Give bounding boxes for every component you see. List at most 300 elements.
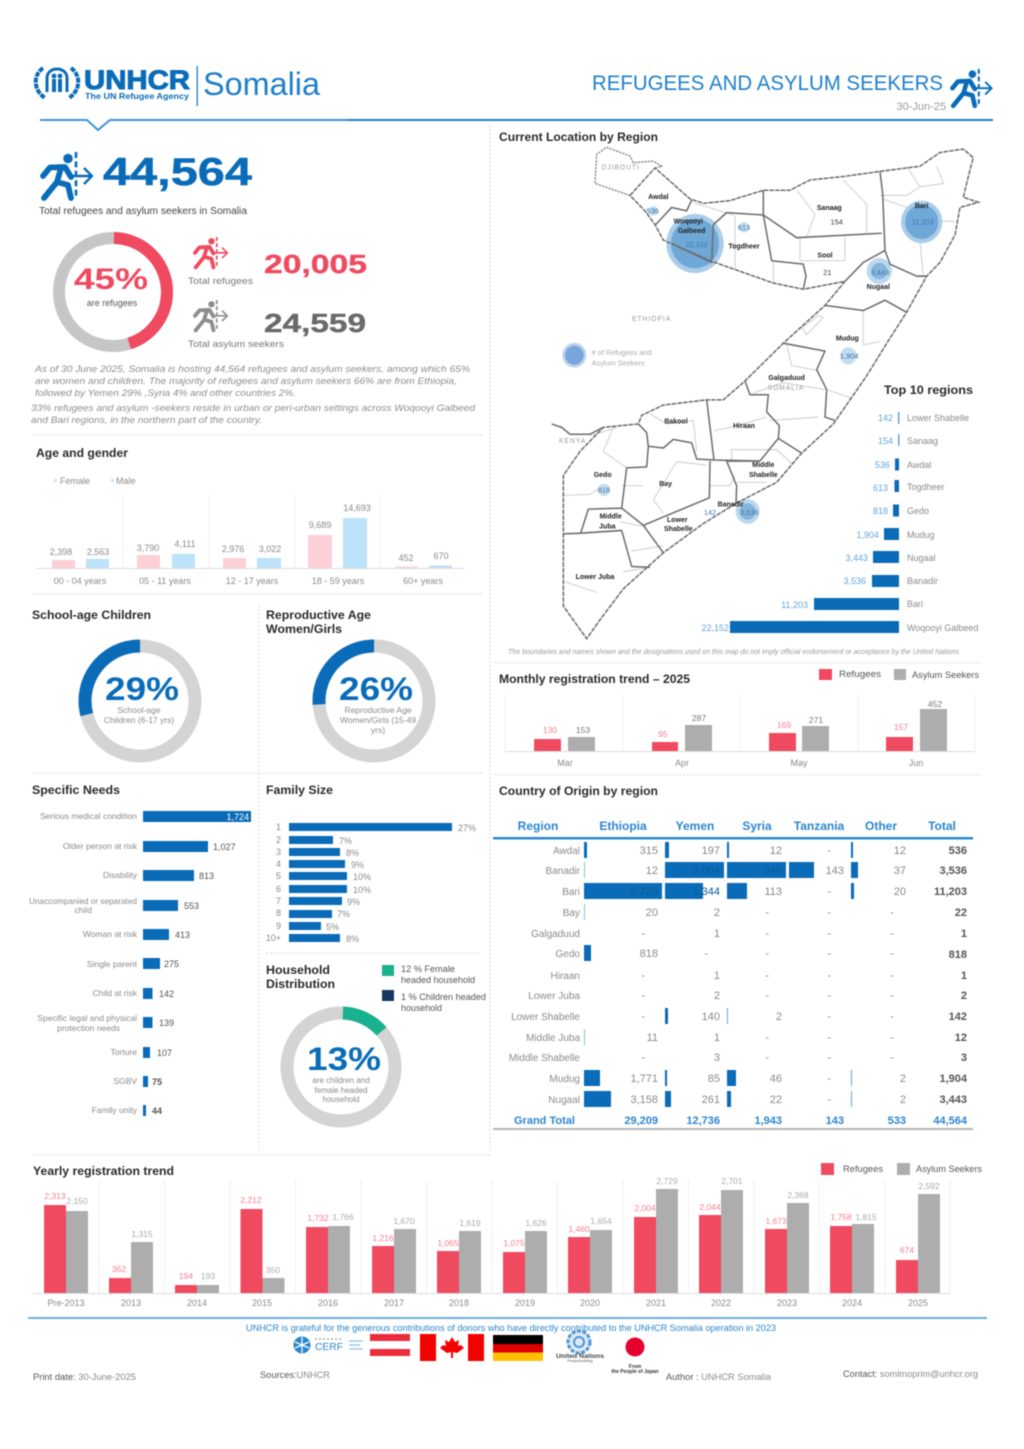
logo: United Nations: Peacebuilding xyxy=(567,1358,593,1363)
logo: from the people of Japan: the People of Japan xyxy=(611,1369,659,1375)
table Other column: - xyxy=(890,928,894,940)
table Other column: - xyxy=(890,970,894,982)
table Total column: 11,203 xyxy=(934,886,967,898)
bar chart: yearly trend: 362 xyxy=(112,1264,126,1274)
donut: share of refugees: are refugees xyxy=(87,298,138,308)
bar chart: age groups: 2,976 xyxy=(222,544,244,554)
table Ethiopia column: 3,158 xyxy=(630,1094,658,1106)
flag: Canada xyxy=(420,1334,484,1361)
bar chart: specific needs: Unaccompanied or separated xyxy=(29,896,137,906)
map: country labels xyxy=(559,165,804,445)
table Tanzania column: - xyxy=(827,845,831,857)
map: region values: 613 xyxy=(738,223,750,232)
table Syria column: 46 xyxy=(770,1073,782,1085)
map: region names: Woqooyi xyxy=(674,218,703,226)
bar chart: family size: 5 xyxy=(276,871,281,881)
map: region boundaries xyxy=(552,171,927,567)
bar chart: specific needs: 275 xyxy=(164,959,179,969)
table grand total row xyxy=(493,1115,973,1130)
bar chart: age groups: 452 xyxy=(398,553,414,563)
map disclaimer: The boundaries and names shown and the designations used on this map do not imply official endorsement or acceptance by the United Nations xyxy=(508,649,959,656)
bar chart: family size: 7% xyxy=(337,909,350,919)
bar chart: specific needs: Specific legal and physical xyxy=(37,1013,137,1023)
legend: monthly trend: Refugees xyxy=(839,669,882,679)
map: region names: Sool xyxy=(817,251,833,259)
bar chart: yearly trend: 2015 xyxy=(252,1298,272,1308)
narrative text block: followed by Yemen 29% ,Syria 4% and other countries 2%. xyxy=(35,388,296,399)
map legend xyxy=(562,343,652,368)
map legend: Asylum Seekers xyxy=(592,358,645,368)
table Other column: - xyxy=(890,1011,894,1023)
bar chart: yearly trend: 2,729 xyxy=(656,1176,678,1186)
legend: female and children headed: headed household xyxy=(401,975,475,985)
icon: total refugees and asylum seekers xyxy=(43,152,92,199)
table Ethiopia column: - xyxy=(641,928,645,940)
bar chart: top 10 regions: 3,536 xyxy=(843,576,866,586)
table header: Total xyxy=(928,819,956,833)
bar chart: specific needs: 44 xyxy=(152,1106,162,1116)
bar chart: yearly trend: 2,212 xyxy=(240,1195,262,1205)
total caption: Total refugees and asylum seekers in Somalia xyxy=(39,206,247,217)
table Syria column: 2 xyxy=(776,1011,782,1023)
bar chart: specific needs: Older person at risk xyxy=(63,841,138,851)
legend: yearly trend: Refugees xyxy=(843,1164,884,1174)
agency tagline: The UN Refugee Agency xyxy=(85,91,189,101)
table Syria column xyxy=(764,845,782,1106)
map: country labels: SOMALIA xyxy=(768,385,804,392)
table Ethiopia column: 9,726 xyxy=(630,886,658,898)
table Total column: 3,443 xyxy=(939,1094,967,1106)
table region names: Bari xyxy=(562,887,580,898)
map: Djibouti border xyxy=(595,147,662,195)
header: UNHCR logo and title xyxy=(36,65,320,106)
bar chart: monthly trend: Mar xyxy=(557,758,573,768)
table Syria column: - xyxy=(765,907,769,919)
donut: reproductive age 26%: Reproductive Age xyxy=(344,705,412,715)
table Ethiopia column: 11 xyxy=(647,1032,658,1044)
bar chart: yearly trend: 1,626 xyxy=(525,1218,547,1228)
table Other column: 20 xyxy=(894,886,906,898)
table Syria column: - xyxy=(765,1052,769,1064)
bar chart: monthly trend: 157 xyxy=(894,722,908,732)
map: region values: 22,152 xyxy=(685,240,708,249)
bar chart: age groups: 3,022 xyxy=(259,544,281,554)
heading: current location by region: Current Location by Region xyxy=(499,130,658,144)
map: region names: Nugaal xyxy=(867,283,890,291)
bar chart: top 10 regions: 3,443 xyxy=(845,553,868,563)
table region names: Awdal xyxy=(553,846,580,857)
table Other column: - xyxy=(890,1032,894,1044)
donut: school-age children 29%: School-age xyxy=(117,705,161,715)
donut: household 13%: household xyxy=(323,1095,359,1104)
donut: school-age children 29%: 29% xyxy=(105,671,179,707)
donut: school-age children 29%: Children (6-17 yrs) xyxy=(104,715,174,725)
table Tanzania column: - xyxy=(827,1032,831,1044)
donor thank-you text: UNHCR is grateful for the generous contributions of donors who have directly contributed to the UNHCR Somalia operation in 2023 xyxy=(246,1323,776,1334)
heading: household distribution xyxy=(266,963,335,991)
footer: sources: Sources:UNHCR xyxy=(260,1370,331,1380)
table Tanzania column xyxy=(826,845,844,1106)
bar chart: age groups: 2,398 xyxy=(50,547,72,557)
report date: 30-Jun-25 xyxy=(896,101,946,113)
table region names: Lower Shabelle xyxy=(511,1012,580,1023)
bar chart: specific needs: child xyxy=(75,905,92,915)
bar chart: specific needs: Family unity xyxy=(92,1105,138,1115)
table Syria column: 12 xyxy=(770,845,782,857)
table Total column: 3,536 xyxy=(939,865,967,877)
heading: reproductive age: Women/Girls xyxy=(266,622,342,636)
map: region values: 3,536 xyxy=(740,508,759,517)
UNHCR wordmark: UNHCR xyxy=(84,65,190,95)
panel: age and gender xyxy=(36,446,465,586)
map: region names: Shabelle xyxy=(664,525,693,533)
logo: United Nations xyxy=(556,1331,605,1363)
bar chart: yearly trend: 2020 xyxy=(580,1298,600,1308)
bar chart: yearly trend: 2,368 xyxy=(787,1190,809,1200)
table data bars xyxy=(584,842,858,1107)
legend: female and male: Female xyxy=(60,476,90,486)
table Other column: - xyxy=(890,948,894,960)
bar chart: yearly trend: 2023 xyxy=(777,1298,797,1308)
header rule with notch xyxy=(40,120,993,130)
table Yemen column: 261 xyxy=(702,1094,720,1106)
donut: reproductive age 26%: yrs) xyxy=(371,725,385,735)
map: region names: Galbeed xyxy=(678,227,705,235)
bar chart: specific needs: 813 xyxy=(199,871,214,881)
bar chart: yearly trend: 2,150 xyxy=(66,1196,88,1206)
map: country outline xyxy=(563,149,978,639)
table Tanzania column: - xyxy=(827,970,831,982)
bar chart: yearly trend xyxy=(33,1176,950,1308)
legend: female and children headed: 12 % Female xyxy=(401,964,455,974)
table Total column: 1,904 xyxy=(939,1073,968,1085)
table Tanzania column: - xyxy=(827,1011,831,1023)
bar chart: yearly trend: 1,758 xyxy=(830,1212,852,1222)
donut: household 13%: are children and xyxy=(312,1076,370,1085)
donut: household 13% xyxy=(285,1011,397,1123)
footer: contact: Contact: somlmoprim@unhcr.org xyxy=(843,1369,978,1379)
table region names: Bay xyxy=(563,908,580,919)
table Tanzania column: - xyxy=(827,1052,831,1064)
table Other column: - xyxy=(890,907,894,919)
map: district lines xyxy=(564,166,955,592)
table Tanzania column: - xyxy=(827,1073,831,1085)
bar chart: age groups: 60+ years xyxy=(403,576,443,586)
narrative text block xyxy=(31,364,476,426)
bar chart: family size: 1 xyxy=(276,822,281,832)
table region names: Lower Juba xyxy=(528,991,580,1002)
bar chart: yearly trend: Pre-2013 xyxy=(47,1298,85,1308)
bar chart: specific needs: Child at risk xyxy=(93,988,138,998)
legend: female and children headed xyxy=(382,964,486,1013)
bar chart: top 10 regions: 11,203 xyxy=(781,600,808,610)
bar chart: yearly trend: 1,815 xyxy=(855,1212,877,1222)
panel: country of origin table xyxy=(493,784,973,1130)
bar chart: specific needs: 107 xyxy=(157,1048,172,1058)
map: region values: 536 xyxy=(647,207,659,216)
table Syria column: - xyxy=(765,970,769,982)
bar chart: specific needs: SGBV xyxy=(113,1076,137,1086)
bar chart: monthly trend: Apr xyxy=(675,758,689,768)
bar chart: yearly trend: 2019 xyxy=(515,1298,535,1308)
bar chart: family size: 7% xyxy=(339,836,352,846)
panel: school-age children xyxy=(32,608,207,768)
bar chart: yearly trend: 1,315 xyxy=(131,1229,153,1239)
map: region names: Lower xyxy=(667,516,688,524)
table header xyxy=(493,819,973,840)
table Syria column: - xyxy=(765,948,769,960)
table Total column: 3 xyxy=(961,1052,967,1064)
bar chart: family size: 2 xyxy=(276,835,281,845)
table Yemen column: 140 xyxy=(702,1011,720,1023)
logo: from the people of Japan: From xyxy=(629,1364,642,1370)
footer: author: Author : UNHCR Somalia xyxy=(666,1372,771,1382)
table region names: Banadir xyxy=(546,866,581,877)
table Total column: 142 xyxy=(949,1011,967,1023)
bar chart: monthly trend: 130 xyxy=(543,725,557,735)
donut: share of refugees xyxy=(58,237,168,347)
bar chart: top 10 regions: 1,904 xyxy=(856,530,879,540)
map: region names: Sanaag xyxy=(817,204,842,212)
bar chart: monthly trend: 287 xyxy=(692,713,706,723)
table Ethiopia column: - xyxy=(641,1011,645,1023)
panel: family size xyxy=(266,783,476,944)
legend: female and children headed: household xyxy=(401,1003,442,1013)
table grand total row: 44,564 xyxy=(933,1115,968,1127)
bar chart: yearly trend: 1,619 xyxy=(459,1218,481,1228)
bar chart: family size: 10% xyxy=(353,885,371,895)
donor logos xyxy=(294,1331,659,1375)
table Syria column: - xyxy=(765,990,769,1002)
bar chart: specific needs: 553 xyxy=(184,901,199,911)
map: region values: 1,904 xyxy=(840,352,858,361)
bar chart: top 10 regions: 536 xyxy=(875,460,890,470)
logo: United Nations: United Nations xyxy=(556,1354,605,1360)
legend: female and children headed: 1 % Children headed xyxy=(401,992,486,1002)
bar chart: yearly trend: 2,313 xyxy=(44,1191,66,1201)
map: region names: Middle xyxy=(752,461,774,469)
bar chart: specific needs: 1,724 xyxy=(226,812,249,822)
bar chart: top 10 regions: 22,152 xyxy=(701,623,729,633)
bar chart: family size: 10% xyxy=(353,872,371,882)
table Ethiopia column: - xyxy=(641,990,645,1002)
table Yemen column: 197 xyxy=(702,845,720,857)
table Syria column: 113 xyxy=(764,886,782,898)
bar chart: monthly trend: 153 xyxy=(576,725,590,735)
heading: reproductive age: Reproductive Age xyxy=(266,608,371,622)
table grand total row: 533 xyxy=(888,1115,906,1127)
table header: Ethiopia xyxy=(599,819,647,833)
map: region names: Banadir xyxy=(718,500,744,508)
bar chart: family size: 7 xyxy=(276,896,281,906)
bar chart: yearly trend: 2021 xyxy=(646,1298,666,1308)
map: region values: 142 xyxy=(704,508,716,517)
table grand total row: Grand Total xyxy=(514,1115,575,1127)
bar chart: yearly trend: 2024 xyxy=(842,1298,862,1308)
donut: household 13%: female headed xyxy=(315,1086,367,1095)
panel: yearly registration trend xyxy=(33,1163,982,1308)
bar chart: age groups: 14,693 xyxy=(343,503,371,513)
bar chart: family size: 3 xyxy=(276,847,281,857)
map: region names: Hiraan xyxy=(733,422,755,430)
bar chart: yearly trend: 1,766 xyxy=(332,1212,354,1222)
bar chart: family size: 27% xyxy=(458,823,476,833)
heading: specific needs: Specific Needs xyxy=(32,783,120,797)
refugees caption: Total refugees xyxy=(188,276,253,287)
map: region names: Middle xyxy=(600,512,622,520)
bar chart: family size: 9% xyxy=(351,860,364,870)
bar chart: yearly trend: 1,732 xyxy=(307,1213,329,1223)
report title: REFUGEES AND ASYLUM SEEKERS xyxy=(592,72,943,95)
table Total column: 1 xyxy=(961,928,967,940)
table grand total row: 1,943 xyxy=(754,1115,782,1127)
bar chart: specific needs: 413 xyxy=(175,930,190,940)
table Yemen column: 1 xyxy=(714,928,720,940)
bar chart: top 10 regions: Woqooyi Galbeed xyxy=(907,623,978,633)
table Ethiopia column xyxy=(630,845,658,1106)
bar chart: family size: 9% xyxy=(347,897,360,907)
bar chart: family size: 10+ xyxy=(266,933,281,943)
map: region values: 818 xyxy=(598,486,610,495)
bar chart: age groups: 2,563 xyxy=(87,547,109,557)
table grand total row: 143 xyxy=(826,1115,844,1127)
table Yemen column: 1 xyxy=(714,1032,720,1044)
logo: CERF: CERF xyxy=(315,1342,343,1353)
bubbles: refugee and asylum seeker counts xyxy=(598,201,942,524)
table Yemen column: 2 xyxy=(714,990,720,1002)
map legend: # of Refugees and xyxy=(592,348,652,357)
heading: top 10 regions: Top 10 regions xyxy=(884,383,973,397)
map: region names: Togdheer xyxy=(728,243,760,251)
panel: monthly registration trend xyxy=(499,669,980,768)
donut: household 13%: 13% xyxy=(307,1041,381,1077)
donut: share of refugees: 45% xyxy=(74,263,148,296)
map: region names: Bari xyxy=(915,202,928,210)
map: region values: 3,443 xyxy=(871,268,889,277)
bar chart: yearly trend: 1,065 xyxy=(437,1238,459,1248)
table Ethiopia column: - xyxy=(641,970,645,982)
table region names: Galgaduud xyxy=(531,929,580,940)
table Ethiopia column: 20 xyxy=(646,907,658,919)
map: region names: Gedo xyxy=(594,471,612,479)
table Yemen column: 3,004 xyxy=(692,865,720,877)
table Yemen column: 1 xyxy=(714,970,720,982)
map: Somalia regions xyxy=(552,147,978,639)
bar chart: specific needs: Disability xyxy=(103,870,138,880)
table Tanzania column: - xyxy=(827,1094,831,1106)
table Other column: - xyxy=(890,990,894,1002)
table Yemen column: - xyxy=(704,948,708,960)
bar chart: yearly trend: 350 xyxy=(266,1265,280,1275)
bar chart: yearly trend: 2,592 xyxy=(918,1181,940,1191)
table grand total row: 12,736 xyxy=(686,1115,720,1127)
table Yemen column: 85 xyxy=(708,1073,720,1085)
map: region names: Lower Juba xyxy=(576,573,614,581)
map: region names: Juba xyxy=(599,523,616,531)
table Total column: 22 xyxy=(955,907,967,919)
table Syria column: - xyxy=(765,928,769,940)
bar chart: yearly trend: 1,075 xyxy=(503,1238,525,1248)
bar chart: yearly trend: 194 xyxy=(179,1271,193,1281)
bar chart: specific needs: 75 xyxy=(152,1077,162,1087)
bar chart: yearly trend: 2016 xyxy=(318,1298,338,1308)
table Total column xyxy=(934,845,968,1106)
table Tanzania column: - xyxy=(827,907,831,919)
bar chart: family size: 8% xyxy=(346,848,359,858)
bar chart: yearly trend: 1,654 xyxy=(590,1216,612,1226)
bar chart: top 10 regions: Togdheer xyxy=(907,482,945,492)
bar chart: top 10 regions: 613 xyxy=(873,483,888,493)
flag: Germany xyxy=(493,1335,543,1361)
panel: top 10 regions xyxy=(701,383,978,633)
heading: age and gender: Age and gender xyxy=(36,446,128,460)
table Other column: - xyxy=(890,1052,894,1064)
bar chart: top 10 regions: Nugaal xyxy=(907,553,936,563)
footer: print date: Print date: 30-June-2025 xyxy=(33,1372,136,1382)
table Other column xyxy=(890,845,906,1106)
table Yemen column: 1,344 xyxy=(692,886,720,898)
narrative text block: As of 30 June 2025, Somalia is hosting 44,564 refugees and asylum seekers, among which 65% xyxy=(34,364,471,375)
bar chart: specific needs xyxy=(29,811,251,1116)
table Tanzania column: - xyxy=(827,886,831,898)
table region names: Hiraan xyxy=(551,971,580,982)
logo: CERF xyxy=(294,1336,363,1354)
legend: female and male: Male xyxy=(116,476,136,486)
heading: yearly trend: Yearly registration trend xyxy=(33,1164,174,1178)
table Tanzania column: - xyxy=(827,990,831,1002)
heading: monthly trend: Monthly registration trend – 2025 xyxy=(499,672,690,686)
map: region values: 154 xyxy=(831,218,843,227)
bar chart: monthly trend: 271 xyxy=(809,715,823,725)
donut: school-age children 29% xyxy=(73,634,207,768)
bar chart: age groups xyxy=(36,495,465,586)
bar chart: top 10 regions: 154 xyxy=(878,436,893,446)
bar chart: specific needs: Single parent xyxy=(87,959,138,969)
bar chart: age groups: 670 xyxy=(433,551,449,561)
table Total column: 12 xyxy=(955,1032,967,1044)
icon: asylum seekers xyxy=(195,300,227,331)
map: region values xyxy=(598,207,934,517)
panel: totals xyxy=(39,151,367,350)
table Tanzania column: - xyxy=(827,948,831,960)
table header: Region xyxy=(518,819,558,833)
icon: refugee running, header xyxy=(952,69,992,107)
bar chart: top 10 regions: Sanaag xyxy=(907,436,938,446)
bar chart: age groups: 9,689 xyxy=(309,520,331,530)
table Ethiopia column: 315 xyxy=(640,845,658,857)
country title: Somalia xyxy=(203,66,320,102)
narrative text block: are women and children. The majority of refugees and asylum seekers 66% are from Ethiopia, xyxy=(35,376,457,387)
table Yemen column: 3 xyxy=(714,1052,720,1064)
report title xyxy=(592,72,946,113)
bar chart: age groups: 18 - 59 years xyxy=(312,576,365,586)
table region names xyxy=(509,846,581,1106)
map: region names: Awdal xyxy=(648,193,669,201)
bar chart: family size xyxy=(266,822,476,944)
big number total: 44,564 xyxy=(103,151,252,194)
bar chart: specific needs: Woman at risk xyxy=(83,929,138,939)
logo: from the people of Japan xyxy=(611,1338,659,1375)
bar chart: yearly trend: 2022 xyxy=(711,1298,731,1308)
bar chart: age groups: 4,111 xyxy=(174,539,196,549)
bar chart: monthly trend: 452 xyxy=(928,699,942,709)
table Tanzania column: 143 xyxy=(826,865,844,877)
heading: family size: Family Size xyxy=(266,783,333,797)
table Tanzania column: - xyxy=(827,928,831,940)
donut: reproductive age 26%: Women/Girls (15-49 xyxy=(340,715,416,725)
asylum seekers number: 24,559 xyxy=(264,308,366,338)
bar chart: yearly trend: 674 xyxy=(900,1245,914,1255)
